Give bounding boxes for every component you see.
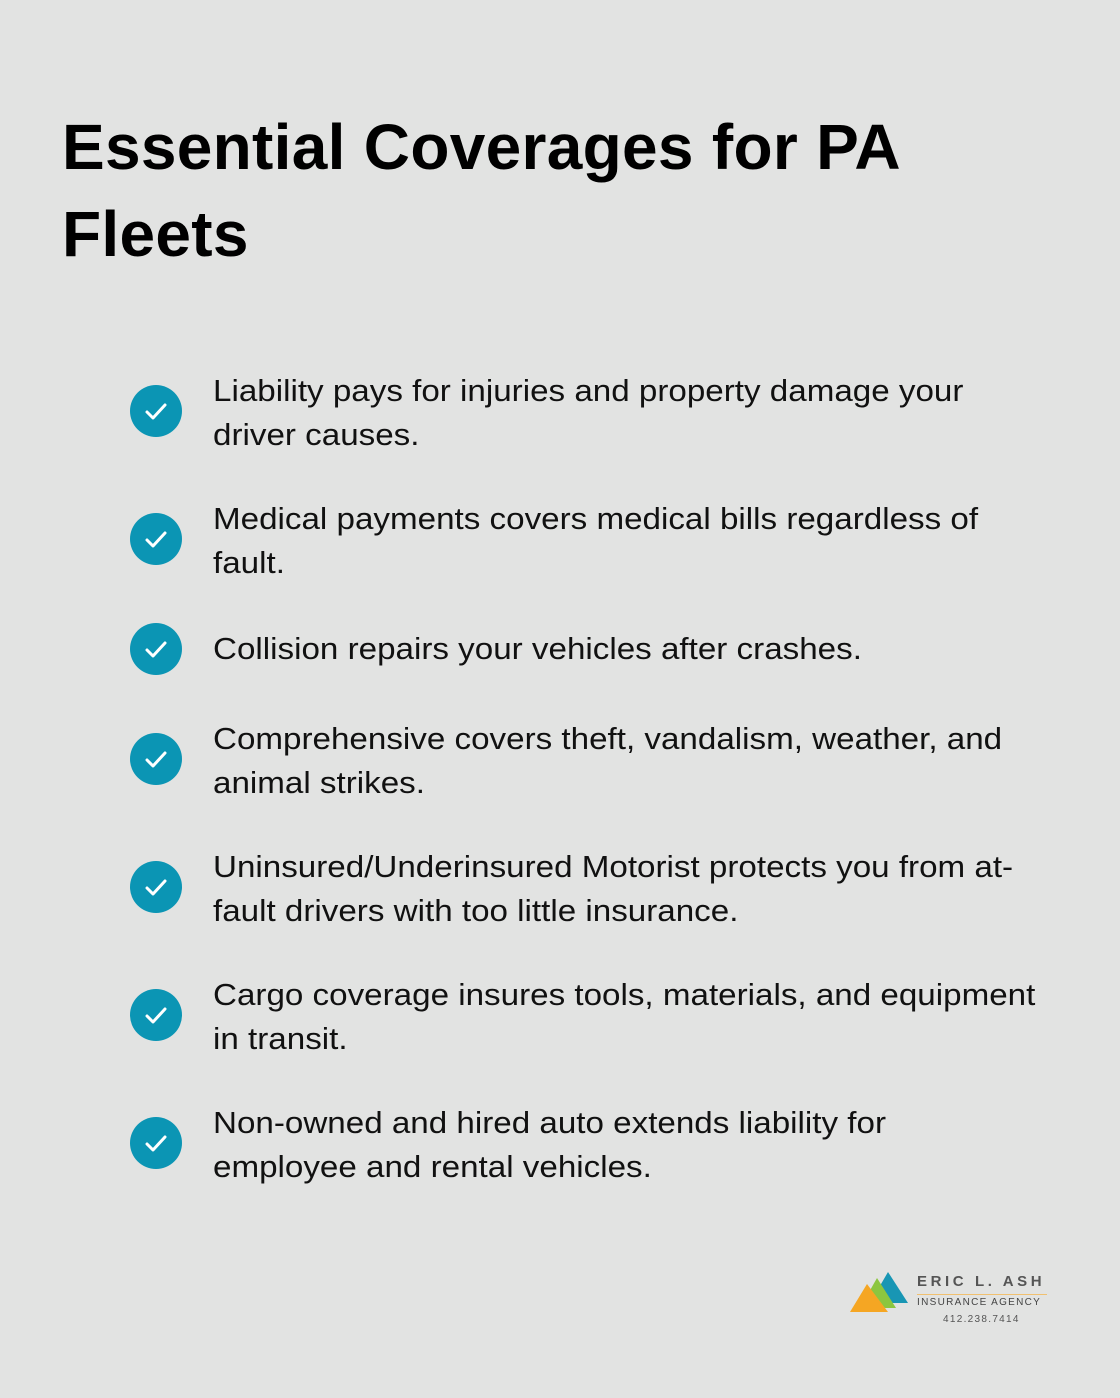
title <box>62 111 901 270</box>
text: driver causes. <box>213 417 419 452</box>
text: Non-owned and hired auto extends liability for <box>213 1105 886 1140</box>
text: animal strikes. <box>213 765 425 800</box>
text: Medical payments covers medical bills regardless of <box>213 501 978 536</box>
text: employee and rental vehicles. <box>213 1149 652 1184</box>
logo <box>850 1272 1047 1325</box>
item: cargo <box>130 977 1036 1056</box>
icon: check <box>130 1117 182 1169</box>
text: agency: INSURANCE AGENCY <box>917 1297 1041 1308</box>
item: uninsured <box>130 849 1013 928</box>
icon: check <box>130 513 182 565</box>
text: in transit. <box>213 1021 348 1056</box>
icon: mountains <box>850 1272 908 1312</box>
icon: check <box>130 861 182 913</box>
text: Liability pays for injuries and property damage your <box>213 373 963 408</box>
text <box>213 501 978 580</box>
icon: check <box>130 989 182 1041</box>
text <box>213 721 1002 800</box>
text <box>213 849 1013 928</box>
text: Uninsured/Underinsured Motorist protects you from at- <box>213 849 1013 884</box>
text <box>213 1105 886 1184</box>
text: Cargo coverage insures tools, materials, and equipment <box>213 977 1035 1012</box>
item: collision <box>130 623 862 675</box>
text: fault. <box>213 545 285 580</box>
text: company name: ERIC L. ASH <box>917 1273 1045 1290</box>
title: Essential Coverages for PA <box>62 111 901 183</box>
item: medical <box>130 501 978 580</box>
text <box>213 373 963 452</box>
icon: check <box>130 385 182 437</box>
item: non-owned <box>130 1105 886 1184</box>
icon: check <box>130 733 182 785</box>
text: fault drivers with too little insurance. <box>213 893 738 928</box>
item: comprehensive <box>130 721 1002 800</box>
text <box>213 977 1036 1056</box>
item: liability <box>130 373 963 452</box>
text: Comprehensive covers theft, vandalism, weather, and <box>213 721 1002 756</box>
text: Collision repairs your vehicles after crashes. <box>213 631 862 666</box>
icon: check <box>130 623 182 675</box>
text: phone: 412.238.7414 <box>943 1314 1020 1325</box>
title: Fleets <box>62 198 249 270</box>
